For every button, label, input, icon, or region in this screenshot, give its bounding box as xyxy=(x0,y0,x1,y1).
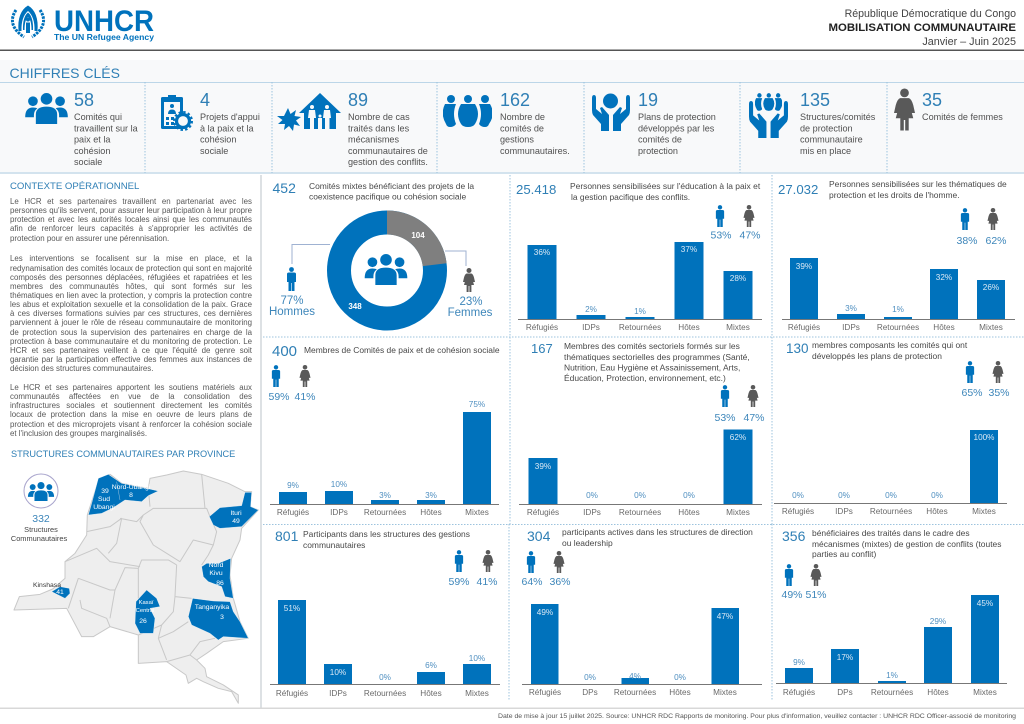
bar chart: 1% xyxy=(892,305,904,314)
women share: Femmes xyxy=(448,307,493,319)
women share: 23% xyxy=(459,296,483,308)
gender split xyxy=(710,205,761,242)
panel: 25.418 persons sensitized xyxy=(516,181,762,332)
panel: 167 members: 167 xyxy=(531,341,553,356)
panel: 356 beneficiaries: parties au conflit) xyxy=(812,549,876,559)
kpi: 162 comités de gestion: gestions xyxy=(500,135,534,145)
kpi: 35 comités de femmes xyxy=(894,88,1003,130)
men share xyxy=(269,267,315,318)
report title: MOBILISATION COMMUNAUTAIRE xyxy=(828,22,1016,34)
panel: 167 members: Nutrition, Eau Hygiène et Assainissement, Arts, xyxy=(564,362,740,372)
label: Tanganyika: 3 xyxy=(220,614,224,621)
bar chart xyxy=(519,430,762,517)
bar chart: Retournées xyxy=(877,323,919,332)
bar chart xyxy=(522,604,762,697)
country: République Démocratique du Congo xyxy=(845,8,1016,20)
kpi: 58 comités: sociale xyxy=(74,157,102,167)
bar chart: Hôtes xyxy=(669,688,691,697)
icon: hands with ball xyxy=(592,94,630,131)
bar chart: Retournées xyxy=(871,688,913,697)
bar chart: Mixtes xyxy=(979,323,1003,332)
icon: people xyxy=(25,93,68,124)
panel: 801 participants: 801 xyxy=(275,528,299,544)
bar chart xyxy=(270,600,500,698)
bar chart: IDPs xyxy=(330,508,348,517)
bar chart: DPs xyxy=(837,688,853,697)
bar chart: Réfugiés xyxy=(526,323,558,332)
panel: 801 participants: communautaires xyxy=(303,540,365,550)
panel: 27.032 persons sensitized: protection et les droits de l'homme. xyxy=(829,190,960,200)
bar chart: Réfugiés xyxy=(277,508,309,517)
men share: Hommes xyxy=(269,306,315,318)
bar chart: Mixtes xyxy=(726,508,750,517)
kpi: 58 comités: 58 xyxy=(74,90,94,110)
kpi: 162 comités de gestion: 162 xyxy=(500,90,530,110)
bar chart: 49% xyxy=(537,608,553,617)
bar chart: Hôtes xyxy=(926,507,948,516)
bar chart: DPs xyxy=(582,688,598,697)
panel: 25.418 persons sensitized: la gestion pacifique des conflits. xyxy=(571,192,690,202)
kpi: 4 projets: Projets d'appui xyxy=(200,112,260,122)
panel: 167 members: Éducation, Protection, environnement, etc.) xyxy=(564,373,726,383)
kpi: 19 plans de protection: développés par les xyxy=(638,123,715,133)
panel: mixed committees donut: 452 xyxy=(272,180,296,196)
gender split: 53% xyxy=(710,230,732,242)
bar chart: IDPs xyxy=(582,323,600,332)
bar chart: 51% xyxy=(284,604,300,613)
bar chart: IDPs xyxy=(329,689,347,698)
gender split: 51% xyxy=(805,589,827,601)
bar chart xyxy=(270,400,499,517)
kpi: 58 comités xyxy=(25,90,139,167)
kpi: 89 cas traités: traités dans les xyxy=(348,123,410,133)
bar chart: 32% xyxy=(936,273,952,282)
bar chart: Retournées xyxy=(619,508,661,517)
kpi: 89 cas traités: gestion des conflits. xyxy=(348,157,428,167)
bar chart: 47% xyxy=(717,612,733,621)
bar chart: Retournées xyxy=(364,689,406,698)
panel: 356 beneficiaries: 356 xyxy=(782,528,806,544)
gender split: 64% xyxy=(521,576,543,588)
gender split xyxy=(714,385,765,424)
donut chart: 104 xyxy=(411,231,425,240)
panel: 167 members xyxy=(519,341,765,517)
panel: 167 members: thématiques sectorielles des programmes (Santé, xyxy=(564,352,750,362)
panel: 801 participants: Participants dans les structures des gestions xyxy=(303,529,470,539)
bar chart: 62% xyxy=(730,433,746,442)
label: Kasai Central: Central xyxy=(136,608,154,614)
kpi: 19 plans de protection: comités de xyxy=(638,135,682,145)
bar chart: Hôtes xyxy=(678,508,700,517)
bar chart: Réfugiés xyxy=(782,507,814,516)
bar chart: 9% xyxy=(287,481,299,490)
bar chart: 10% xyxy=(331,480,347,489)
kpi: 19 plans de protection: Plans de protection xyxy=(638,112,716,122)
gender split: 49% xyxy=(781,589,803,601)
label: Nord Kivu: Nord xyxy=(209,562,224,569)
gender split xyxy=(956,208,1007,247)
panel: 130 members: développés les plans de protection xyxy=(812,351,942,361)
panel: 27.032 persons sensitized xyxy=(778,179,1015,332)
kpi: 162 comités de gestion xyxy=(443,90,570,156)
icon: people xyxy=(365,254,407,285)
bar chart: 1% xyxy=(886,671,898,680)
bar chart: 37% xyxy=(681,245,697,254)
icon: burst and house with family xyxy=(277,93,341,131)
header title block xyxy=(828,8,1016,48)
donut chart xyxy=(339,210,447,318)
gender split: 59% xyxy=(268,391,290,403)
bar chart: 3% xyxy=(379,491,391,500)
panel: mixed committees donut: coexistence pacifique ou cohésion sociale xyxy=(309,192,466,202)
gender split: 35% xyxy=(988,387,1010,399)
label: Tanganyika: Tanganyika xyxy=(195,604,229,611)
map: DRC provinces xyxy=(14,471,258,703)
bar chart: Mixtes xyxy=(465,689,489,698)
label: Sud Ubangi: 39 xyxy=(101,488,109,495)
panel: 27.032 persons sensitized: Personnes sensibilisées sur les thématiques de xyxy=(829,179,1007,189)
bar chart: 26% xyxy=(983,283,999,292)
logo wordmark: UNHCR xyxy=(54,5,154,38)
bar chart: 1% xyxy=(634,307,646,316)
bar chart: Hôtes xyxy=(420,508,442,517)
bar chart: 0% xyxy=(885,491,897,500)
panel: 356 beneficiaries: bénéficiaires des traités dans le cadre des xyxy=(812,528,970,538)
kpi: 58 comités: paix et la xyxy=(74,135,111,145)
panel: 400 members: 400 xyxy=(272,343,297,360)
gender split: 41% xyxy=(294,391,316,403)
kpi: 19 plans de protection: 19 xyxy=(638,90,658,110)
bar chart: 3% xyxy=(845,304,857,313)
gender split xyxy=(268,365,316,403)
panel: 356 beneficiaries: mécanismes (mixtes) de gestion de conflits (toutes xyxy=(812,539,1001,549)
gender split: 53% xyxy=(714,412,736,424)
gender split: 65% xyxy=(961,387,983,399)
label: Nord Ubangi: 8 xyxy=(129,492,133,499)
bar chart: 0% xyxy=(634,491,646,500)
bar chart xyxy=(774,430,1007,516)
bar chart: 100% xyxy=(974,433,994,442)
kpi: 135 structures: communautaire xyxy=(800,135,863,145)
kpi: 58 comités: travaillent sur la xyxy=(74,123,139,133)
total structures: Communautaires xyxy=(11,534,67,543)
kpi: 135 structures: de protection xyxy=(800,123,853,133)
label: Nord Kivu: Kivu xyxy=(209,570,223,577)
kpi: 4 projets xyxy=(161,90,260,156)
bar chart: IDPs xyxy=(835,507,853,516)
men share: 77% xyxy=(280,295,304,307)
kpi: 89 cas traités: mécanismes xyxy=(348,135,399,145)
panel: 25.418 persons sensitized: Personnes sensibilisées sur l'éducation à la paix et xyxy=(570,181,761,191)
panel: 27.032 persons sensitized: 27.032 xyxy=(778,182,818,197)
panel: mixed committees donut xyxy=(269,180,493,319)
bar chart: Mixtes xyxy=(465,508,489,517)
logo: UNHCR xyxy=(12,5,154,42)
kpi: 35 comités de femmes: 35 xyxy=(922,90,942,110)
bar chart: Réfugiés xyxy=(783,688,815,697)
bar chart: Hôtes xyxy=(420,689,442,698)
bar chart: Mixtes xyxy=(972,507,996,516)
bar chart: 3% xyxy=(425,491,437,500)
icon: clipboard and gear xyxy=(161,95,192,130)
kpi: 162 comités de gestion: Nombre de xyxy=(500,112,545,122)
kpi: 35 comités de femmes: Comités de femmes xyxy=(922,112,1003,122)
gender split: 62% xyxy=(985,235,1007,247)
label: Sud Ubangi: Ubangi xyxy=(93,504,115,511)
gender split xyxy=(448,550,498,588)
text block: operational context xyxy=(10,197,252,438)
panel: 130 members: 130 xyxy=(786,341,809,356)
bar chart: IDPs xyxy=(842,323,860,332)
panel: 25.418 persons sensitized: 25.418 xyxy=(516,182,556,197)
heading: structures par province: STRUCTURES COMMUNAUTAIRES PAR PROVINCE xyxy=(11,449,235,459)
bar chart: 39% xyxy=(535,462,551,471)
icon: circled people xyxy=(24,474,58,508)
icon: three persons xyxy=(443,95,493,127)
bar chart: Réfugiés xyxy=(276,689,308,698)
bar chart: Retournées xyxy=(619,323,661,332)
bar chart: 0% xyxy=(584,673,596,682)
panel: 304 participants: 304 xyxy=(527,528,551,544)
kpi: 4 projets: sociale xyxy=(200,146,228,156)
kpi: 4 projets: cohésion xyxy=(200,135,236,145)
bar chart: Mixtes xyxy=(973,688,997,697)
panel: 304 participants: ou leadership xyxy=(562,538,613,548)
bar chart: 0% xyxy=(379,673,391,682)
panel: key figures xyxy=(0,60,1024,174)
total structures: Structures xyxy=(24,525,58,534)
bar chart: 29% xyxy=(930,617,946,626)
gender split xyxy=(781,564,827,601)
panel: 304 participants xyxy=(521,527,762,697)
gender split xyxy=(521,551,571,588)
panel: 130 members xyxy=(774,340,1010,516)
kpi: 89 cas traités: 89 xyxy=(348,90,368,110)
kpi: 19 plans de protection xyxy=(592,90,716,156)
gender split: 36% xyxy=(549,576,571,588)
bar chart: 4% xyxy=(629,672,641,681)
bar chart: 10% xyxy=(469,654,485,663)
bar chart: 6% xyxy=(425,661,437,670)
gender split: 47% xyxy=(743,412,765,424)
bar chart: 10% xyxy=(330,668,346,677)
gender split: 41% xyxy=(476,576,498,588)
bar chart: Hôtes xyxy=(933,323,955,332)
bar chart: 0% xyxy=(792,491,804,500)
heading: chiffres clés: CHIFFRES CLÉS xyxy=(10,65,120,81)
label: Kinshasa: Kinshasa xyxy=(33,582,61,589)
bar chart: 28% xyxy=(730,274,746,283)
bar chart: 0% xyxy=(586,491,598,500)
label: Kasai Central: 26 xyxy=(139,618,147,625)
bar chart xyxy=(782,258,1015,332)
gender split: 38% xyxy=(956,235,978,247)
bar chart: 36% xyxy=(534,248,550,257)
kpi: 135 structures: mis en place xyxy=(800,146,851,156)
period: Janvier – Juin 2025 xyxy=(922,36,1016,48)
text block: operational context: Le HCR et ses partenaires travaillent en partenariat avec les personnes qu'ils servent, pour assurer leur participation à leur propre protection et avec les autorités locales ainsi que les communautés afin de renforcer leurs capacités à s'approprier les activités de protection pour en assurer une pérennisation. xyxy=(10,197,252,243)
panel: 130 members: membres composants les comités qui ont xyxy=(812,340,968,350)
kpi: 162 comités de gestion: communautaires. xyxy=(500,146,570,156)
kpi: 89 cas traités xyxy=(277,90,428,167)
text block: operational context: Les interventions se focalisent sur la mise en place, et la redynamisation des comités locaux de protection qui sont en majorité composés des personnes déplacées, réfugiées et rapatriées et les membres des communautés hôtes, qui sont formés sur les thématiques en lien avec la protection, y compris la protection contre les abus et exploitation sexuelle et la consolidation de la paix. Grace à ces diverses formations suivies par ces structures, ces dernières parviennent à jouer le rôle de réseau communautaire de monitoring de protection sous la supervision des partenaires en charge de la protection à base communautaire et du monitoring de protection. Le HCR et ses partenaires veillent à ce que l'équité de genre soit garantie par la participation effective des femmes aux instances de décision des structures communautaires. xyxy=(10,254,252,373)
icon: woman xyxy=(894,88,915,130)
kpi: 58 comités: cohésion xyxy=(74,146,110,156)
label: Kasai Central: Kasaï xyxy=(139,600,154,606)
bar chart: Retournées xyxy=(614,688,656,697)
bar chart: 0% xyxy=(931,491,943,500)
panel: 400 members: Membres de Comités de paix et de cohésion sociale xyxy=(304,345,500,355)
bar chart xyxy=(518,242,762,332)
kpi: 135 structures: 135 xyxy=(800,90,830,110)
bar chart: Mixtes xyxy=(713,688,737,697)
kpi: 58 comités: Comités qui xyxy=(74,112,122,122)
bar chart: 9% xyxy=(793,658,805,667)
donut chart: 348 xyxy=(348,302,362,311)
bar chart: Réfugiés xyxy=(788,323,820,332)
logo tagline: The UN Refugee Agency xyxy=(54,32,154,42)
kpi: 135 structures xyxy=(749,90,876,156)
bar chart: 2% xyxy=(585,305,597,314)
bar chart: Mixtes xyxy=(726,323,750,332)
label: Sud Ubangi: Sud xyxy=(98,496,110,503)
heading: contexte opérationnel: CONTEXTE OPÉRATIONNEL xyxy=(10,181,140,192)
kpi: 89 cas traités: Nombre de cas xyxy=(348,112,410,122)
kpi: 89 cas traités: communautaires de xyxy=(348,146,428,156)
bar chart: Réfugiés xyxy=(529,688,561,697)
bar chart: Retournées xyxy=(870,507,912,516)
value: Kinshasa: 41 xyxy=(56,589,64,596)
bar chart: Hôtes xyxy=(678,323,700,332)
label: Nord Kivu: 86 xyxy=(216,580,224,587)
panel: 304 participants: participants actives dans les structures de direction xyxy=(562,527,753,537)
gender split: 47% xyxy=(739,230,761,242)
kpi: 162 comités de gestion: comités de xyxy=(500,123,544,133)
panel: 801 participants xyxy=(270,528,500,698)
bar chart: 39% xyxy=(796,262,812,271)
bar chart: 0% xyxy=(838,491,850,500)
kpi: 135 structures: Structures/comités xyxy=(800,112,876,122)
label: Ituri: 49 xyxy=(232,518,240,525)
panel: mixed committees donut: Comités mixtes bénéficiant des projets de la xyxy=(309,181,474,191)
total structures xyxy=(11,474,67,543)
footer note: Date de mise à jour 15 juillet 2025. Source: UNHCR RDC Rapports de monitoring. Pour plus d'information, veuillez contacter : UNHCR RDC Officer-associé de monitoring xyxy=(498,713,1017,720)
kpi: 19 plans de protection: protection xyxy=(638,146,678,156)
gender split: 59% xyxy=(448,576,470,588)
women share xyxy=(448,268,493,319)
bar chart: Retournées xyxy=(364,508,406,517)
bar chart: 75% xyxy=(469,400,485,409)
bar chart: 45% xyxy=(977,599,993,608)
label: Ituri: Ituri xyxy=(230,510,242,517)
total structures: 332 xyxy=(32,513,50,525)
text block: operational context: Le HCR et ses partenaires apportent les soutiens matériels aux communautés affectées en vue de la consolidation des infrastructures sociales et soutiennent directement les comités locaux de protection dans la mise en oeuvre de leurs plans de protection et des microprojets visant à renforcer la cohésion sociale et l'inclusion des groupes marginalisés. xyxy=(10,383,252,438)
label: Nord Ubangi: Nord-Ubangi xyxy=(112,484,151,491)
bar chart xyxy=(776,595,1007,697)
kpi: 4 projets: à la paix et la xyxy=(200,123,255,133)
icon: hands with people xyxy=(749,93,788,138)
bar chart: 17% xyxy=(837,653,853,662)
gender split xyxy=(961,361,1010,399)
panel: 167 members: Membres des comités sectoriels formés sur les xyxy=(564,341,740,351)
bar chart: Réfugiés xyxy=(527,508,559,517)
panel: 356 beneficiaries xyxy=(776,528,1007,697)
logo emblem xyxy=(12,6,44,37)
bar chart: IDPs xyxy=(583,508,601,517)
panel: 400 members xyxy=(268,343,500,517)
bar chart: 0% xyxy=(683,491,695,500)
bar chart: 0% xyxy=(674,673,686,682)
bar chart: Hôtes xyxy=(927,688,949,697)
kpi: 4 projets: 4 xyxy=(200,90,210,110)
